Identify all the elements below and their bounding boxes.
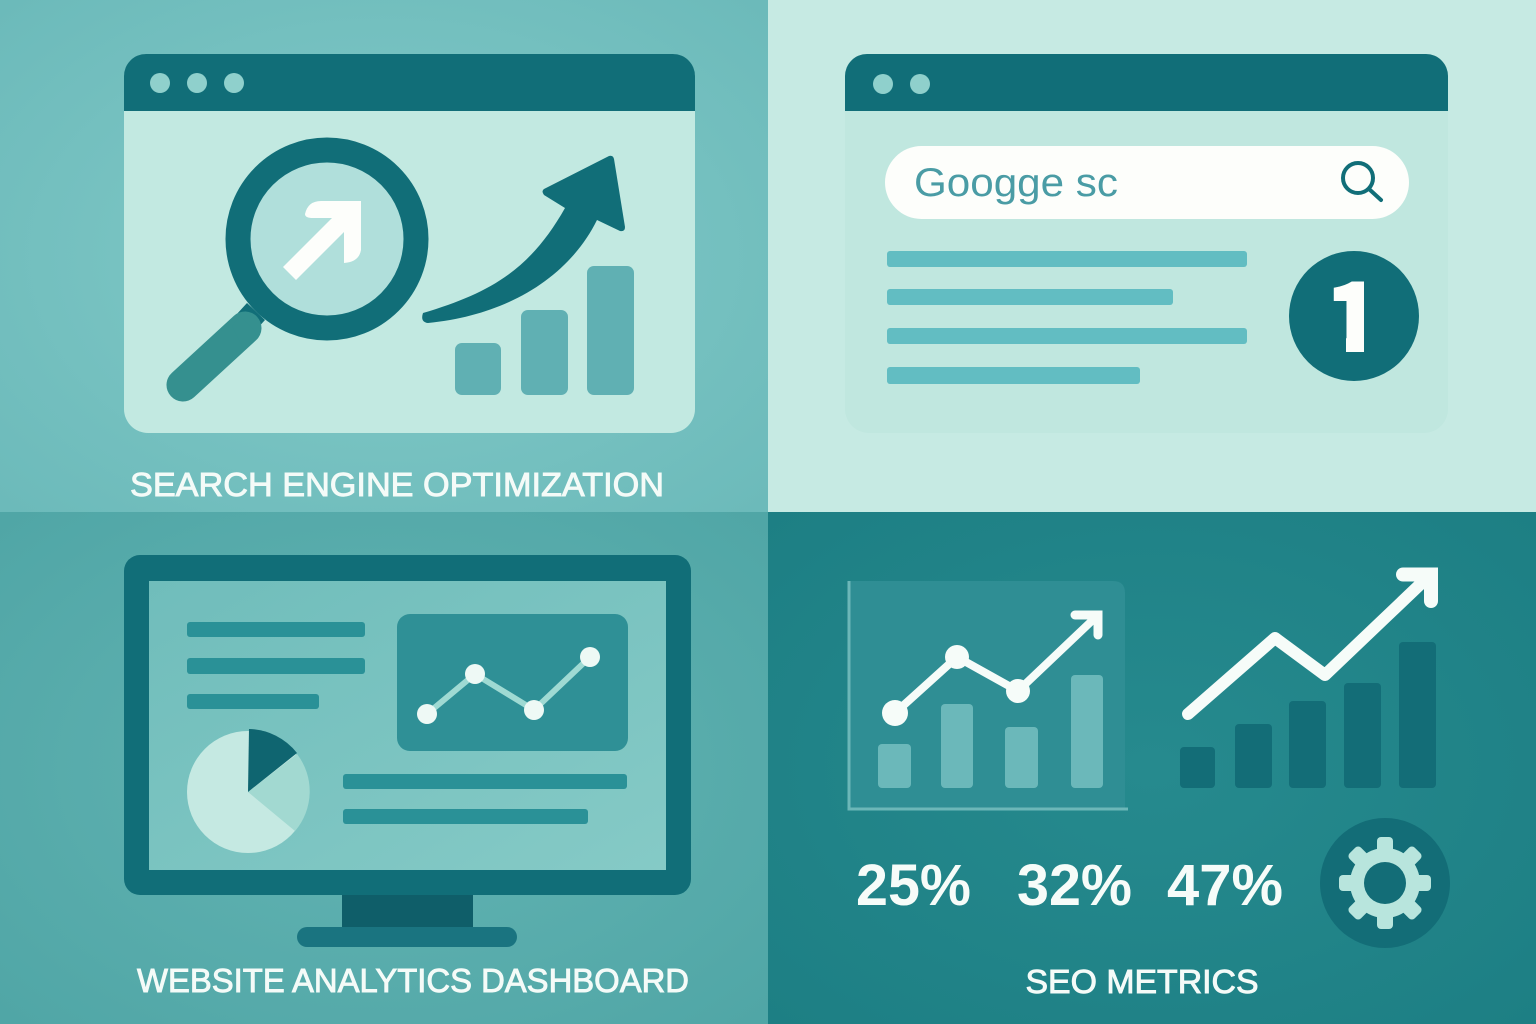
browser window: SEO [124, 54, 695, 433]
text lines: top left [187, 622, 365, 709]
panel: website analytics dashboard [0, 512, 768, 1024]
line chart card [397, 614, 628, 751]
heading: website analytics dashboard: WEBSITE ANALYTICS DASHBOARD [137, 962, 689, 999]
panel: SEO metrics [768, 512, 1536, 1024]
search bar [885, 146, 1409, 219]
search bar: Googge sc [914, 161, 1118, 205]
icon: magnifying glass with arrow [183, 150, 416, 385]
search result lines [887, 251, 1247, 384]
panel: search results [768, 0, 1536, 512]
panel: search engine optimization [0, 0, 768, 512]
text lines: bottom [343, 774, 627, 824]
badge: rank number one [1289, 244, 1419, 381]
icon: rising curved arrow [422, 156, 625, 323]
icon: search [1343, 163, 1381, 200]
chart: bars and trend line card [849, 581, 1128, 809]
monitor [124, 555, 691, 947]
bar chart: growth bars [455, 266, 634, 395]
chart: dark bars and trend arrow [1180, 574, 1436, 788]
metric: 25%: 25% [856, 853, 971, 918]
metric: 32%: 32% [1017, 853, 1132, 918]
heading: SEO metrics: SEO METRICS [1026, 963, 1258, 1000]
heading: search engine optimization: SEARCH ENGINE OPTIMIZATION [130, 467, 664, 504]
metric: 47%: 47% [1167, 853, 1283, 918]
badge: rank number one: 1 [1326, 244, 1382, 380]
browser window: search [845, 54, 1448, 433]
icon: gear badge [1320, 818, 1450, 948]
pie chart [187, 729, 310, 853]
